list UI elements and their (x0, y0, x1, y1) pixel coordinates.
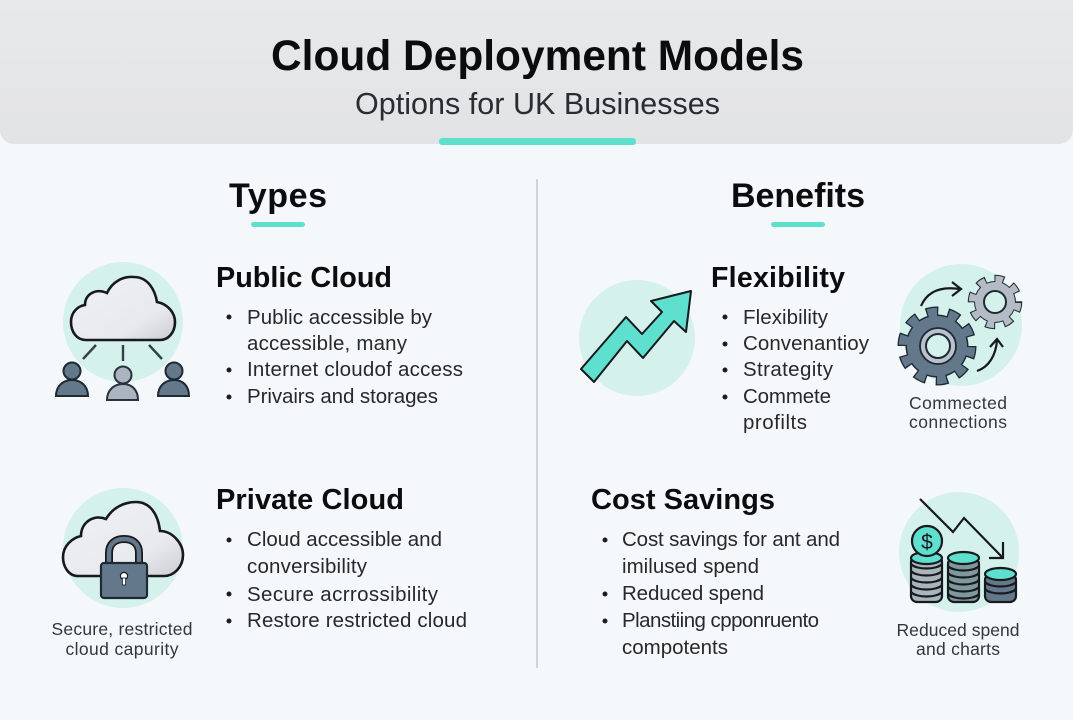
text block: flexibility: Strategity (743, 358, 834, 381)
title: Cloud Deployment Models (271, 32, 804, 79)
caption: coin stacks icon: and charts (916, 639, 1000, 659)
icon: coin stacks with falling arrow (899, 492, 1019, 612)
column divider (536, 179, 538, 668)
header band (0, 0, 1073, 145)
caption: private cloud icon (52, 619, 192, 659)
caption: gears icon: connections (909, 412, 1007, 432)
heading: Types: Types (229, 177, 327, 215)
caption: private cloud icon: Secure, restricted (52, 619, 192, 639)
caption: private cloud icon: cloud capurity (66, 639, 179, 659)
subtitle: Options for UK Businesses (355, 87, 720, 121)
text block: cost savings: Cost Savings (591, 484, 775, 516)
text block: public cloud: accessible, many (247, 332, 408, 355)
header accent bar (439, 138, 636, 145)
heading: Benefits: Benefits (731, 177, 865, 215)
icon: public cloud with users (56, 262, 189, 400)
text block: cost savings: Reduced spend (622, 582, 764, 605)
text block: private cloud (216, 484, 467, 632)
text block: flexibility (711, 262, 870, 434)
caption: coin stacks icon (896, 620, 1020, 659)
text block: private cloud: Restore restricted cloud (247, 609, 467, 632)
text block: flexibility: Flexibility (743, 306, 829, 329)
text block: cost savings: imilused spend (622, 555, 759, 578)
text block: public cloud: Internet cloudof access (247, 358, 463, 381)
icon: growth arrow (579, 280, 695, 396)
text block: cost savings (591, 484, 840, 659)
icon: private cloud with padlock (63, 488, 183, 608)
text block: cost savings: Planstiing cpponruento (622, 609, 819, 632)
text block: private cloud: Cloud accessible and (247, 528, 442, 551)
caption: coin stacks icon: Reduced spend (896, 620, 1020, 640)
text block: cost savings: compotents (622, 636, 728, 659)
text block: flexibility: Flexibility (711, 262, 845, 294)
text block: flexibility: Convenantioy (743, 332, 870, 355)
text block: public cloud: Public accessible by (247, 306, 433, 329)
text block: public cloud: Privairs and storages (247, 385, 438, 408)
icon: gears (900, 264, 1022, 386)
text block: public cloud: Public Cloud (216, 262, 392, 294)
text block: private cloud: conversibility (247, 555, 368, 578)
text block: public cloud (216, 262, 463, 408)
caption: gears icon (909, 393, 1007, 432)
icon: coin stacks with falling arrow: $ (921, 531, 933, 554)
text block: private cloud: Private Cloud (216, 484, 404, 516)
caption: gears icon: Commected (909, 393, 1007, 413)
text block: private cloud: Secure acrrossibility (247, 583, 439, 606)
text block: flexibility: Commete (743, 385, 831, 408)
text block: cost savings: Cost savings for ant and (622, 528, 840, 551)
text block: flexibility: profilts (743, 411, 807, 434)
